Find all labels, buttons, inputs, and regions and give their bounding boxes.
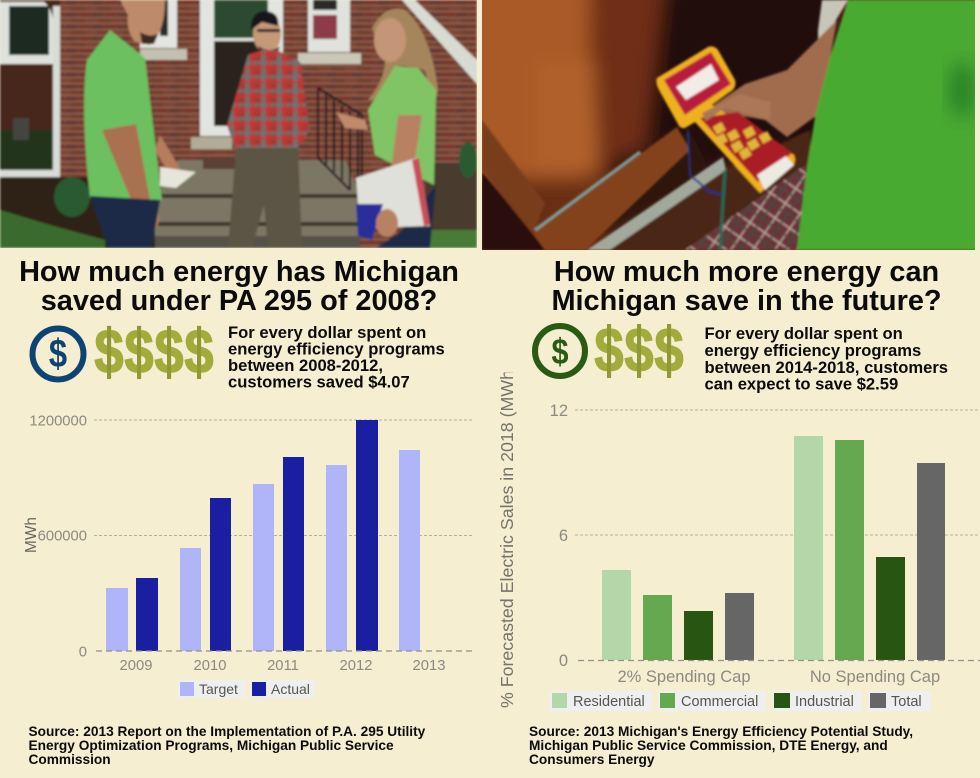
steps xyxy=(155,160,360,240)
text: right dollar savings statement: between 2014-2018, customers xyxy=(704,358,948,377)
bar chart: MWh target vs actual xyxy=(23,414,473,698)
source: left: Energy Optimization Programs, Michigan Public Service xyxy=(28,738,394,753)
heading: right question: How much more energy can xyxy=(554,256,939,288)
text: right dollar savings statement xyxy=(704,324,948,394)
man centre xyxy=(253,15,281,53)
window right xyxy=(308,0,350,52)
source: left xyxy=(28,724,426,767)
icon: dark green dollar coin: $ xyxy=(551,333,569,373)
2% spending cap bars xyxy=(602,570,754,660)
icon: four green dollar signs: $ xyxy=(155,318,184,387)
text: left dollar savings statement: energy efficiency programs xyxy=(228,340,445,358)
y axis values xyxy=(550,402,568,670)
target bars xyxy=(106,450,420,651)
heading: left question xyxy=(19,256,459,317)
photo: technician holding yellow meter against wooden door xyxy=(460,0,980,250)
legend: Residential xyxy=(573,694,645,710)
x axis years: 2011 xyxy=(267,658,299,674)
arm and hand xyxy=(702,20,837,137)
text: right dollar savings statement: can expect to save $2.59 xyxy=(704,374,898,394)
bar chart: percent of forecasted electric sales xyxy=(497,364,980,711)
icon: four green dollar signs xyxy=(95,318,214,387)
source: left: Commission xyxy=(28,752,111,767)
x axis years: 2010 xyxy=(194,658,226,674)
y axis values: 0 xyxy=(79,644,87,660)
x axis groups xyxy=(617,668,940,686)
text: left dollar savings statement: For every dollar spent on xyxy=(228,323,426,342)
x axis years: 2013 xyxy=(413,658,445,674)
icon: three green dollar signs: $ xyxy=(625,316,654,386)
icon: navy dollar coin: $ xyxy=(49,331,67,376)
icon: three green dollar signs: $ xyxy=(595,316,624,386)
icon: three green dollar signs: $ xyxy=(655,316,684,386)
legend: Commercial xyxy=(681,694,758,710)
text: left dollar savings statement: between 2008-2012, xyxy=(228,356,383,375)
text: right dollar savings statement: energy efficiency programs xyxy=(704,341,921,360)
legend xyxy=(549,691,931,711)
green shirt xyxy=(797,0,980,250)
clipboard xyxy=(160,167,196,188)
source: right: Source: 2013 Michigan's Energy Efficiency Potential Study, xyxy=(529,724,913,739)
no spending cap bars xyxy=(794,436,945,660)
x axis years: 2009 xyxy=(120,658,152,674)
legend: Target xyxy=(199,681,238,697)
y axis label, clipped at the top as in the original: % Forecasted Electric Sales in 2018 (MWh) xyxy=(497,364,517,708)
icon: navy dollar coin xyxy=(32,328,84,380)
window left xyxy=(0,0,60,176)
y axis values: 600000 xyxy=(38,528,87,544)
legend xyxy=(178,680,315,698)
thumb xyxy=(702,94,770,121)
gutter xyxy=(402,0,477,84)
heading: left question: saved under PA 295 of 2008? xyxy=(41,285,437,317)
legend: Industrial xyxy=(795,694,854,710)
icon: four green dollar signs: $ xyxy=(95,318,124,387)
source: right: Michigan Public Service Commission, DTE Energy, and xyxy=(529,738,888,753)
text: right dollar savings statement: For every dollar spent on xyxy=(704,324,903,343)
actual bars xyxy=(136,420,378,651)
x axis years xyxy=(120,658,445,674)
source: left: Source: 2013 Report on the Implementation of P.A. 295 Utility xyxy=(28,724,426,739)
railing xyxy=(318,88,362,190)
icon: four green dollar signs: $ xyxy=(185,318,214,387)
text: left dollar savings statement xyxy=(228,323,445,392)
binder xyxy=(356,158,430,228)
x axis years: 2012 xyxy=(340,658,372,674)
icon: three green dollar signs xyxy=(595,316,684,386)
y axis values: 0 xyxy=(559,652,568,670)
lawn and soil xyxy=(0,177,165,248)
y axis values: 12 xyxy=(550,402,568,420)
legend: Total xyxy=(891,694,922,710)
icon: dark green dollar coin xyxy=(535,326,585,376)
x axis groups: 2% Spending Cap xyxy=(617,668,751,686)
heading: right question: Michigan save in the future? xyxy=(551,285,942,317)
meter xyxy=(656,46,795,193)
source: right: Consumers Energy xyxy=(529,752,655,767)
y axis values: 6 xyxy=(559,527,568,545)
icon: four green dollar signs: $ xyxy=(125,318,154,387)
woman right xyxy=(368,9,438,108)
heading: left question: How much energy has Michigan xyxy=(19,256,459,288)
source: right xyxy=(529,724,913,767)
heading: right question xyxy=(551,256,942,317)
door xyxy=(200,0,283,136)
y axis label: MWh xyxy=(23,517,40,553)
photo: energy auditors talking to homeowner on porch steps xyxy=(0,0,477,248)
window middle xyxy=(140,0,177,48)
man left xyxy=(120,0,165,45)
text: left dollar savings statement: customers saved $4.07 xyxy=(228,372,410,392)
x axis groups: No Spending Cap xyxy=(810,668,940,686)
legend: Actual xyxy=(271,681,310,697)
y axis values: 1200000 xyxy=(29,414,87,430)
y axis values xyxy=(29,414,87,660)
